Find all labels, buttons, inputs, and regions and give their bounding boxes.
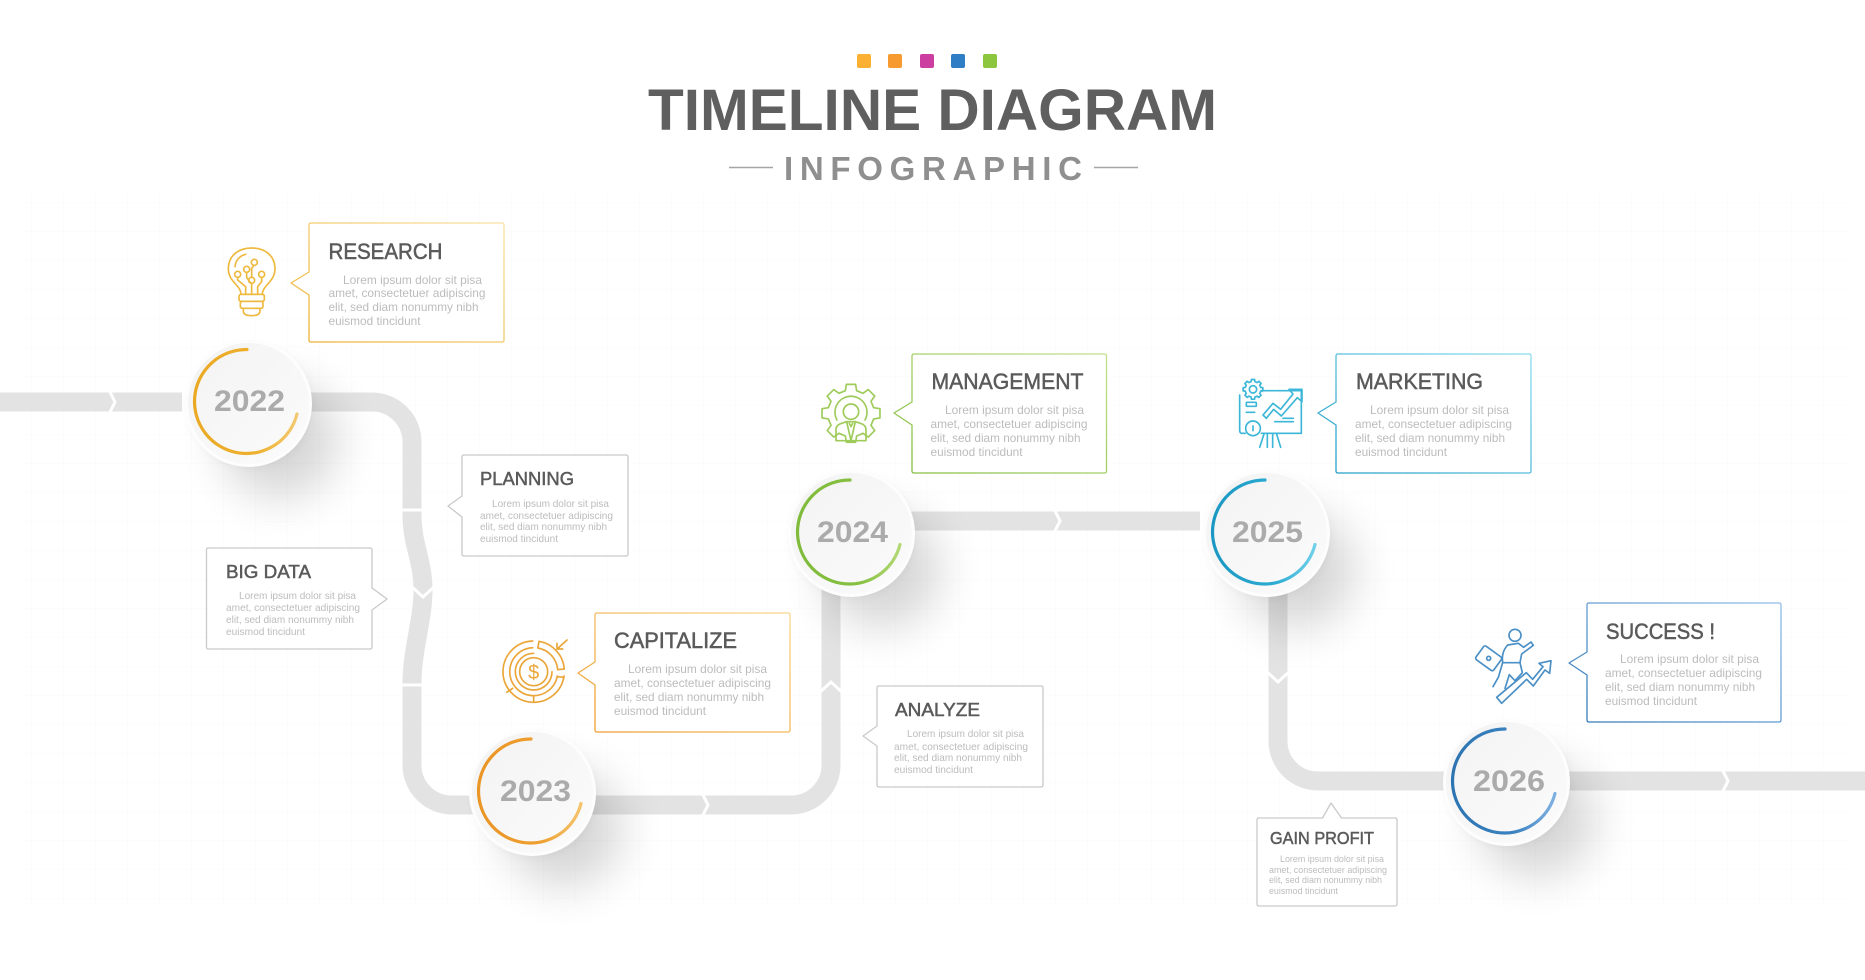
year node 2022 bbox=[186, 342, 338, 498]
callout: success: amet, consectetuer adipiscing bbox=[1605, 666, 1762, 680]
callout: capitalize: amet, consectetuer adipiscing bbox=[614, 676, 771, 690]
callout: analyze bbox=[863, 686, 1043, 787]
callout: gain profit bbox=[1257, 803, 1397, 906]
callout: success: SUCCESS ! bbox=[1606, 619, 1715, 644]
callout: research bbox=[291, 223, 504, 342]
year node 2024: 2024 bbox=[817, 516, 888, 549]
year node 2026 bbox=[1444, 720, 1595, 877]
year node 2023: 2023 bbox=[500, 775, 571, 808]
callout: gain profit: GAIN PROFIT bbox=[1270, 828, 1374, 848]
year node 2025: 2025 bbox=[1232, 516, 1303, 549]
callout: management: euismod tincidunt bbox=[930, 445, 1023, 459]
callout: success: Lorem ipsum dolor sit pisa bbox=[1620, 652, 1759, 666]
callout: research: amet, consectetuer adipiscing bbox=[328, 286, 486, 300]
callout: analyze: euismod tincidunt bbox=[894, 764, 973, 776]
callout: big data bbox=[206, 548, 387, 649]
callout: research: RESEARCH bbox=[328, 239, 442, 264]
callout: gain profit: euismod tincidunt bbox=[1269, 886, 1338, 897]
callout: planning: amet, consectetuer adipiscing bbox=[480, 510, 613, 522]
callout: analyze: ANALYZE bbox=[895, 699, 980, 720]
callout: gain profit: elit, sed diam nonummy nibh bbox=[1269, 875, 1382, 886]
callout: management: amet, consectetuer adipiscing bbox=[930, 417, 1088, 431]
callout: success: euismod tincidunt bbox=[1605, 694, 1698, 708]
callout: capitalize: CAPITALIZE bbox=[614, 628, 737, 653]
callout: analyze: Lorem ipsum dolor sit pisa bbox=[907, 728, 1024, 740]
icon: presentation board bbox=[1240, 379, 1302, 447]
icon: gear with person bbox=[822, 384, 880, 442]
icon: dollar target: $ bbox=[528, 662, 539, 684]
title: TIMELINE DIAGRAM bbox=[648, 78, 1217, 143]
callout: marketing: amet, consectetuer adipiscing bbox=[1355, 417, 1512, 431]
callout: marketing: Lorem ipsum dolor sit pisa bbox=[1370, 403, 1509, 417]
year node 2025 bbox=[1204, 472, 1355, 628]
callout: capitalize bbox=[578, 613, 790, 732]
callout: big data: BIG DATA bbox=[226, 561, 312, 582]
callout: management: Lorem ipsum dolor sit pisa bbox=[945, 403, 1084, 417]
year node 2023 bbox=[470, 730, 622, 887]
callout: marketing: euismod tincidunt bbox=[1355, 445, 1448, 459]
callout: capitalize: elit, sed diam nonummy nibh bbox=[614, 690, 764, 704]
callout: planning: euismod tincidunt bbox=[480, 533, 558, 545]
callout: research: euismod tincidunt bbox=[328, 314, 421, 328]
callout: big data: euismod tincidunt bbox=[226, 626, 305, 638]
callout: big data: Lorem ipsum dolor sit pisa bbox=[239, 590, 356, 602]
callout: analyze: amet, consectetuer adipiscing bbox=[894, 741, 1028, 753]
callout: marketing: MARKETING bbox=[1356, 369, 1483, 394]
timeline track bbox=[0, 390, 1865, 817]
callout: planning: PLANNING bbox=[480, 468, 574, 489]
colour squares bbox=[857, 54, 997, 68]
callout: gain profit: Lorem ipsum dolor sit pisa bbox=[1280, 854, 1385, 865]
icon: running businessman bbox=[1475, 629, 1551, 703]
icon: light bulb bbox=[228, 248, 275, 316]
callout: capitalize: euismod tincidunt bbox=[614, 704, 707, 718]
callout: capitalize: Lorem ipsum dolor sit pisa bbox=[628, 662, 767, 676]
callout: planning: Lorem ipsum dolor sit pisa bbox=[492, 498, 609, 510]
callout: marketing bbox=[1318, 354, 1531, 473]
callout: research: Lorem ipsum dolor sit pisa bbox=[343, 273, 482, 287]
callout: success bbox=[1569, 603, 1781, 722]
callout: big data: elit, sed diam nonummy nibh bbox=[226, 614, 354, 626]
callout: gain profit: amet, consectetuer adipiscing bbox=[1269, 865, 1387, 876]
icon: dollar target bbox=[503, 640, 567, 702]
year node 2024 bbox=[790, 472, 940, 628]
callout: management bbox=[894, 354, 1106, 473]
year node 2022: 2022 bbox=[214, 385, 285, 418]
callout: planning bbox=[448, 455, 628, 556]
subtitle: INFOGRAPHIC bbox=[784, 150, 1082, 187]
callout: success: elit, sed diam nonummy nibh bbox=[1605, 680, 1755, 694]
callout: big data: amet, consectetuer adipiscing bbox=[226, 602, 360, 614]
callout: planning: elit, sed diam nonummy nibh bbox=[480, 521, 607, 533]
callout: marketing: elit, sed diam nonummy nibh bbox=[1355, 431, 1505, 445]
callout: management: MANAGEMENT bbox=[932, 369, 1084, 394]
callout: analyze: elit, sed diam nonummy nibh bbox=[894, 752, 1022, 764]
callout: management: elit, sed diam nonummy nibh bbox=[930, 431, 1080, 445]
callout: research: elit, sed diam nonummy nibh bbox=[328, 300, 478, 314]
year node 2026: 2026 bbox=[1473, 765, 1545, 798]
